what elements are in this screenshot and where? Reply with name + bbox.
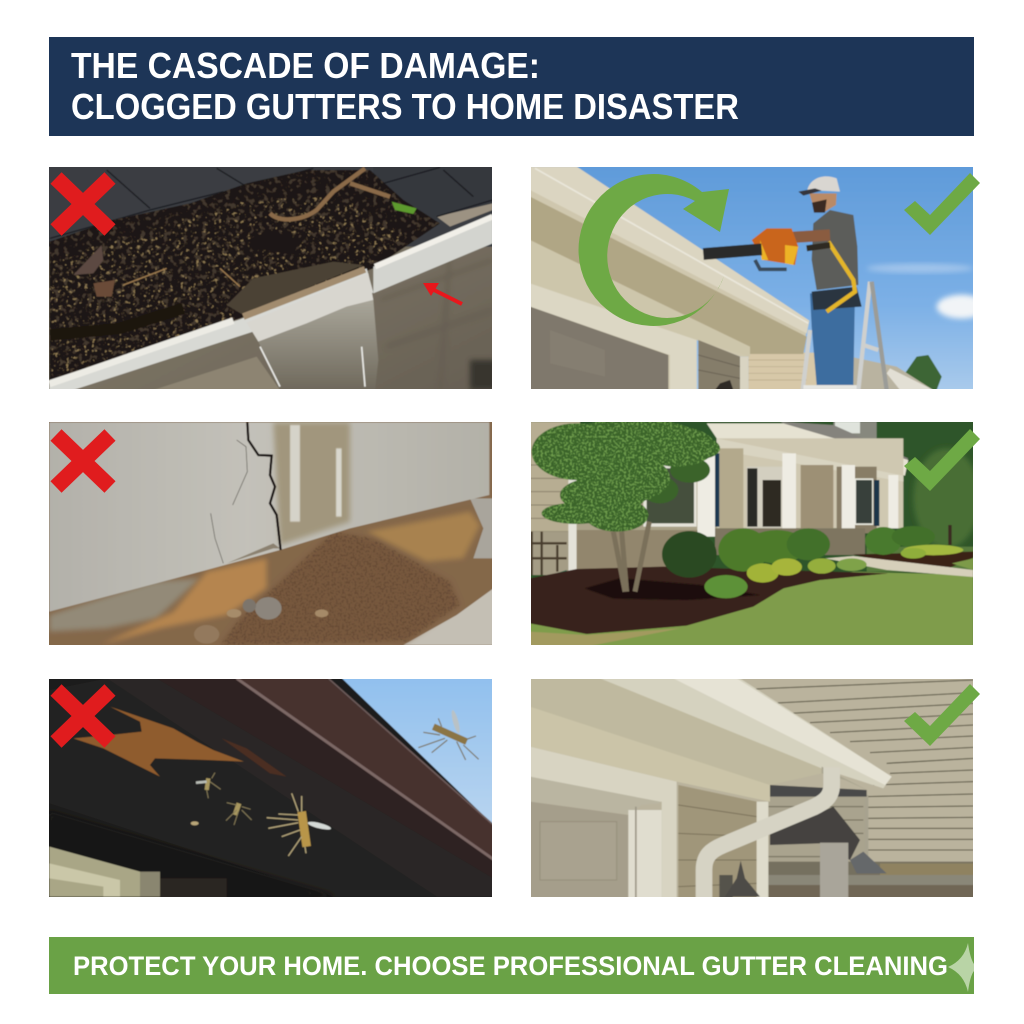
small mosquitoes [191,773,252,825]
tree [905,355,942,390]
shrubs [662,526,963,598]
title banner [49,37,974,136]
vinyl siding [747,680,973,850]
window trim [49,847,227,898]
icon: green check [904,684,980,746]
duct and concrete post [770,807,887,900]
mosquito in sky [418,709,479,760]
icon: green check [904,173,980,235]
photo: clean gutter and downspout [531,679,973,897]
porch columns [697,453,898,547]
title text [71,45,739,127]
rotted wood patch [73,707,244,777]
photo: rotted fascia with mosquitoes under a dark gutter [49,679,492,897]
panel: professional cleaning with leaf blower [531,167,980,389]
ornamental tree [532,418,720,592]
photo: cracked foundation wall with washed-out soil [49,422,492,645]
banner text: PROTECT YOUR HOME. CHOOSE PROFESSIONAL GUTTER CLEANING [73,951,948,981]
icon: sparkle [948,943,974,992]
stone wall [768,862,975,900]
garden beds [530,552,973,634]
call-to-action banner [49,937,974,994]
wall lantern [719,861,760,898]
foundation wall [49,422,489,612]
icon: red X [56,435,110,487]
panel: clean white gutter and downspout [531,679,980,897]
icon: red X [56,178,110,230]
panel: clogged overflowing gutter [49,167,492,389]
walkway [825,556,973,577]
panel: rotted fascia and mosquitoes [49,679,492,897]
icon: green check [904,429,980,491]
photo: worker on ladder clearing the gutter [531,167,973,389]
roof edge and soffit [530,678,892,900]
ladder [803,282,887,390]
arrow: red pointer to the overflow [423,283,462,304]
eroded soil [49,498,493,645]
panel: foundation crack and erosion [49,422,492,645]
lawn [529,547,977,647]
large mosquito on fascia [267,793,332,856]
photo: house front with tidy landscaping [531,422,973,645]
crack [211,422,281,563]
worker [703,176,862,385]
icon: red X [56,690,110,742]
panel: healthy home and landscaping [531,422,980,645]
photo: clogged gutter with debris and overflowing water [49,167,492,389]
icon: green circular arrow [579,174,729,326]
title text: THE CASCADE OF DAMAGE: [71,45,540,86]
cloud [867,264,987,319]
downspout [704,767,832,900]
title text: CLOGGED GUTTERS TO HOME DISASTER [71,86,739,127]
